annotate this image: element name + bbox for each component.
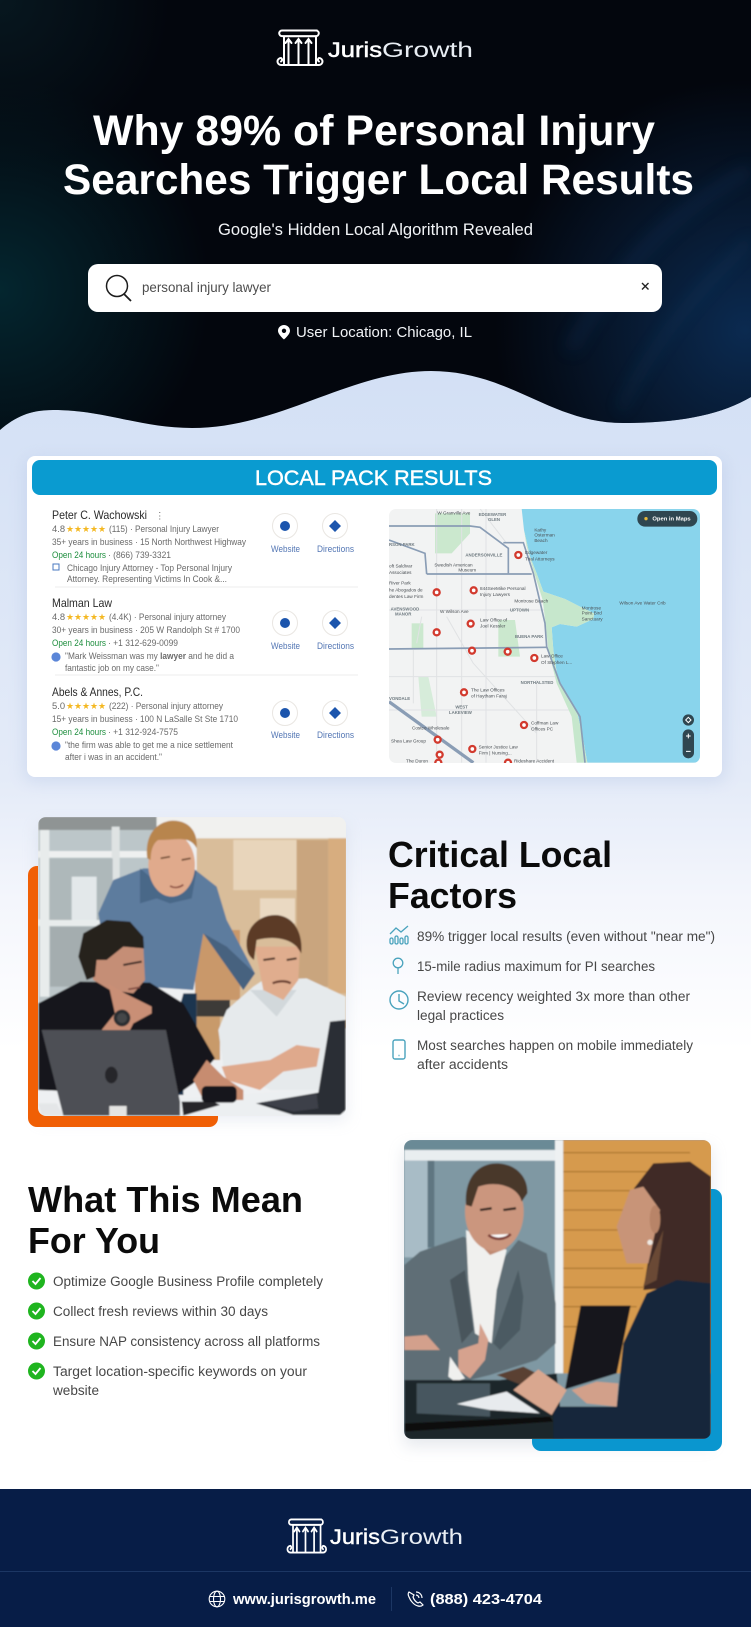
map labels: he Abogados de xyxy=(389,588,423,593)
listing: Abels & Annes: Open 24 hours xyxy=(52,726,106,737)
action buttons: Website xyxy=(271,730,300,740)
listing: Malman Law: ★★★★★ xyxy=(66,612,106,622)
listing: Malman Law: Open 24 hours xyxy=(52,637,106,648)
map controls xyxy=(683,714,694,758)
heading: what this mean for you: For You xyxy=(28,1220,160,1261)
map labels: of Haytham Faraj xyxy=(471,693,507,698)
page background xyxy=(0,370,751,1050)
listing: Malman Law: fantastic job on my case." xyxy=(65,662,159,673)
icon: phone xyxy=(408,1592,423,1606)
footer logo xyxy=(287,1519,463,1553)
map labels: Montrose xyxy=(582,605,601,610)
map labels: NORTHALSTED xyxy=(521,680,553,685)
action buttons: Website xyxy=(271,544,300,554)
listing: Abels & Annes: ★★★★★ xyxy=(66,701,106,711)
icon: pin xyxy=(393,958,403,974)
shoreline park xyxy=(524,530,594,763)
list: critical local factors: 89% trigger local results (even without "near me") xyxy=(417,929,715,944)
action buttons: Website xyxy=(271,641,300,651)
listing: Peter C. Wachowski: ★★★★★ xyxy=(66,524,106,534)
listing: Peter C. Wachowski: Chicago Injury Attorney - Top Personal Injury xyxy=(67,562,232,573)
header bar xyxy=(32,460,717,495)
list: critical local factors: legal practices xyxy=(417,1008,504,1023)
panel: local pack results xyxy=(24,456,751,782)
icon: phone xyxy=(393,1040,405,1059)
man jacket xyxy=(404,1237,556,1382)
laptop silver xyxy=(42,1030,183,1116)
list: critical local factors xyxy=(390,926,715,1072)
list: what this means: Ensure NAP consistency across all platforms xyxy=(53,1334,320,1349)
action buttons: Directions xyxy=(317,544,354,554)
listing: Peter C. Wachowski: ⋮ xyxy=(155,510,164,521)
listing: Peter C. Wachowski: · (866) 739-3321 xyxy=(108,549,171,560)
footer logo: Growth xyxy=(380,1526,463,1549)
title: Why 89% of Personal Injury xyxy=(93,107,655,155)
icon: globe xyxy=(209,1591,225,1607)
listing: Peter C. Wachowski: Peter C. Wachowski xyxy=(52,508,147,522)
listing: Malman Law: Malman Law xyxy=(52,596,112,610)
map labels: VONDALE xyxy=(389,696,410,701)
list: what this means: website xyxy=(52,1383,99,1398)
icon: location pin xyxy=(278,325,290,340)
listing: Malman Law: "Mark Weissman was my lawyer and he did a xyxy=(65,650,235,661)
map labels: dentes Law Firm xyxy=(389,594,424,599)
right laptop xyxy=(256,1020,346,1115)
heading: critical local factors: Critical Local xyxy=(388,834,612,875)
icon: column logo xyxy=(287,1519,326,1553)
map labels: oft Saldivar xyxy=(389,564,413,569)
listing: Abels & Annes: 5.0 xyxy=(52,700,65,711)
list: what this means xyxy=(28,1272,323,1398)
search query: personal injury lawyer xyxy=(142,279,271,295)
listing: Peter C. Wachowski: Attorney. Representing Victims In Cook &... xyxy=(67,573,227,584)
list: critical local factors: Most searches happen on mobile immediately xyxy=(417,1038,693,1053)
list: critical local factors: after accidents xyxy=(417,1057,508,1072)
listing: Abels & Annes: after i was in an accident." xyxy=(65,751,162,762)
map labels: Trial Attorneys xyxy=(525,557,555,562)
action buttons xyxy=(271,514,354,740)
logo: JurisGrowth header xyxy=(278,30,473,65)
map labels: Beach xyxy=(534,538,548,543)
title xyxy=(63,107,694,204)
map labels: 844SeeMike Personal xyxy=(480,586,526,591)
listing: Abels & Annes: Abels & Annes, P.C. xyxy=(52,685,143,699)
listing: Abels & Annes xyxy=(51,685,238,762)
map labels: Osterman xyxy=(534,533,555,538)
map labels: Offices PC xyxy=(531,727,554,732)
map labels: Edgewater xyxy=(525,550,548,555)
footer xyxy=(0,1489,751,1627)
map labels: Coffman Law xyxy=(531,721,559,726)
heading: critical local factors xyxy=(388,834,612,916)
icon: column logo xyxy=(278,30,322,65)
heading: what this mean for you xyxy=(28,1179,303,1261)
map labels: The Duron xyxy=(406,759,428,764)
open in maps: Open in Maps xyxy=(652,517,691,523)
right man xyxy=(217,978,346,1068)
map labels: Of Stephen L... xyxy=(541,660,572,665)
listing: Malman Law: · +1 312-629-0099 xyxy=(108,637,178,648)
map labels: Sanctuary xyxy=(582,616,603,621)
map labels: RSON PARK xyxy=(389,542,416,547)
blue accent xyxy=(532,1189,722,1451)
listing: Peter C. Wachowski: Open 24 hours xyxy=(52,549,106,560)
table xyxy=(178,1102,184,1116)
map labels: W Wilson Ave xyxy=(440,609,469,614)
listing: Abels & Annes: · +1 312-924-7575 xyxy=(108,726,178,737)
listing: Abels & Annes: 15+ years in business · 100 N LaSalle St Ste 1710 xyxy=(52,713,238,724)
wordmark: Juris xyxy=(330,1526,380,1549)
map labels: Rideshare Accident xyxy=(514,759,555,764)
listing: Abels & Annes: (222) · Personal injury attorney xyxy=(109,700,223,711)
woman xyxy=(634,1162,711,1297)
map labels: EDGEWATER xyxy=(479,512,507,517)
checks xyxy=(28,1272,45,1380)
map labels: Firm | Nursing... xyxy=(479,750,512,755)
orange accent xyxy=(28,866,218,1127)
pins xyxy=(434,552,537,766)
map labels: GLEN xyxy=(488,517,500,522)
map labels: The Law Offices xyxy=(471,687,505,692)
listing: Malman Law: 4.8 xyxy=(52,611,65,622)
map labels: Kathy xyxy=(534,527,547,532)
map labels: Senior Justice Law xyxy=(479,744,518,749)
listing: Peter C. Wachowski xyxy=(52,508,246,584)
listing: Malman Law xyxy=(51,596,240,673)
laptop xyxy=(565,1306,631,1389)
map labels: Costco Wholesale xyxy=(412,725,450,730)
listing: Malman Law: (4.4K) · Personal injury attorney xyxy=(109,611,226,622)
hands xyxy=(404,1335,440,1350)
listing: Peter C. Wachowski: (115) · Personal Injury Lawyer xyxy=(109,523,219,534)
map labels: River Park xyxy=(389,580,411,585)
lake xyxy=(522,509,713,763)
icon: magnifier xyxy=(106,276,131,301)
left man xyxy=(38,982,215,1095)
map labels: Law Office of xyxy=(480,617,508,622)
website contact: www.jurisgrowth.me xyxy=(232,1592,376,1608)
map labels: W Granville Ave xyxy=(437,510,471,515)
list: what this means: Target location-specific keywords on your xyxy=(53,1364,308,1379)
map xyxy=(389,509,700,763)
map labels: Montrose Beach xyxy=(514,599,549,604)
icon: clear xyxy=(642,283,648,290)
subtitle: Google's Hidden Local Algorithm Revealed xyxy=(218,221,533,239)
search bar xyxy=(88,264,662,312)
map labels xyxy=(389,510,666,764)
phone contact: (888) 423-4704 xyxy=(430,1591,543,1608)
map labels: AVENSWOOD xyxy=(391,607,419,612)
highways xyxy=(389,526,585,763)
map labels: BUENA PARK xyxy=(515,634,544,639)
standing man xyxy=(98,868,255,990)
map labels: Shea Law Group xyxy=(391,738,426,743)
map labels: Swedish American xyxy=(434,562,473,567)
map labels: LAKEVIEW xyxy=(449,710,473,715)
user location: User Location: Chicago, IL xyxy=(296,324,472,341)
map labels: Joel Kessler xyxy=(480,623,506,628)
list: critical local factors: Review recency weighted 3x more than other xyxy=(417,989,691,1004)
listing: Abels & Annes: "the firm was able to get me a nice settlement xyxy=(65,739,233,750)
map labels: Point Bird xyxy=(582,611,602,616)
open in maps xyxy=(637,511,697,527)
list: what this means: Optimize Google Business Profile completely xyxy=(53,1274,323,1289)
title: Searches Trigger Local Results xyxy=(63,156,694,204)
action buttons: Directions xyxy=(317,730,354,740)
heading: what this mean for you: What This Mean xyxy=(28,1179,303,1220)
heading: critical local factors: Factors xyxy=(388,875,517,916)
panel: consultation photo with blue accent xyxy=(400,1137,722,1451)
listing: Peter C. Wachowski: 4.8 xyxy=(52,523,65,534)
photo: three men at laptops xyxy=(33,813,350,1120)
list: what this means: Collect fresh reviews within 30 days xyxy=(53,1304,268,1319)
action buttons: Directions xyxy=(317,641,354,651)
map labels: Wilson Ave Water Crib xyxy=(619,600,666,605)
wordmark: Juris xyxy=(328,39,382,62)
panel: team photo with orange accent xyxy=(28,813,350,1127)
map labels: Injury Lawyers xyxy=(480,592,511,597)
map labels: ANDERSONVILLE xyxy=(465,553,502,558)
map labels: Museum xyxy=(458,568,476,573)
street grid xyxy=(389,509,577,763)
map labels: Law Office xyxy=(541,654,563,659)
icon: clock xyxy=(390,991,408,1009)
parks xyxy=(412,513,520,717)
map labels: MANOR xyxy=(395,612,412,617)
map labels: UPTOWN xyxy=(510,608,529,613)
hand on mouse xyxy=(193,1060,243,1100)
table xyxy=(404,1373,563,1439)
logo: JurisGrowth header: Growth xyxy=(382,39,473,62)
listing: Malman Law: 30+ years in business · 205 W Randolph St # 1700 xyxy=(52,624,240,635)
map labels: WEST xyxy=(455,705,468,710)
listing: Peter C. Wachowski: 35+ years in business · 15 North Northwest Highway xyxy=(52,536,246,547)
photo: lawyer and client xyxy=(400,1137,717,1443)
header bar: LOCAL PACK RESULTS xyxy=(255,467,492,490)
map labels: Associates xyxy=(389,570,412,575)
list: critical local factors: 15-mile radius maximum for PI searches xyxy=(417,959,655,974)
icon: chart xyxy=(390,926,408,944)
hero background with wave xyxy=(0,0,751,440)
